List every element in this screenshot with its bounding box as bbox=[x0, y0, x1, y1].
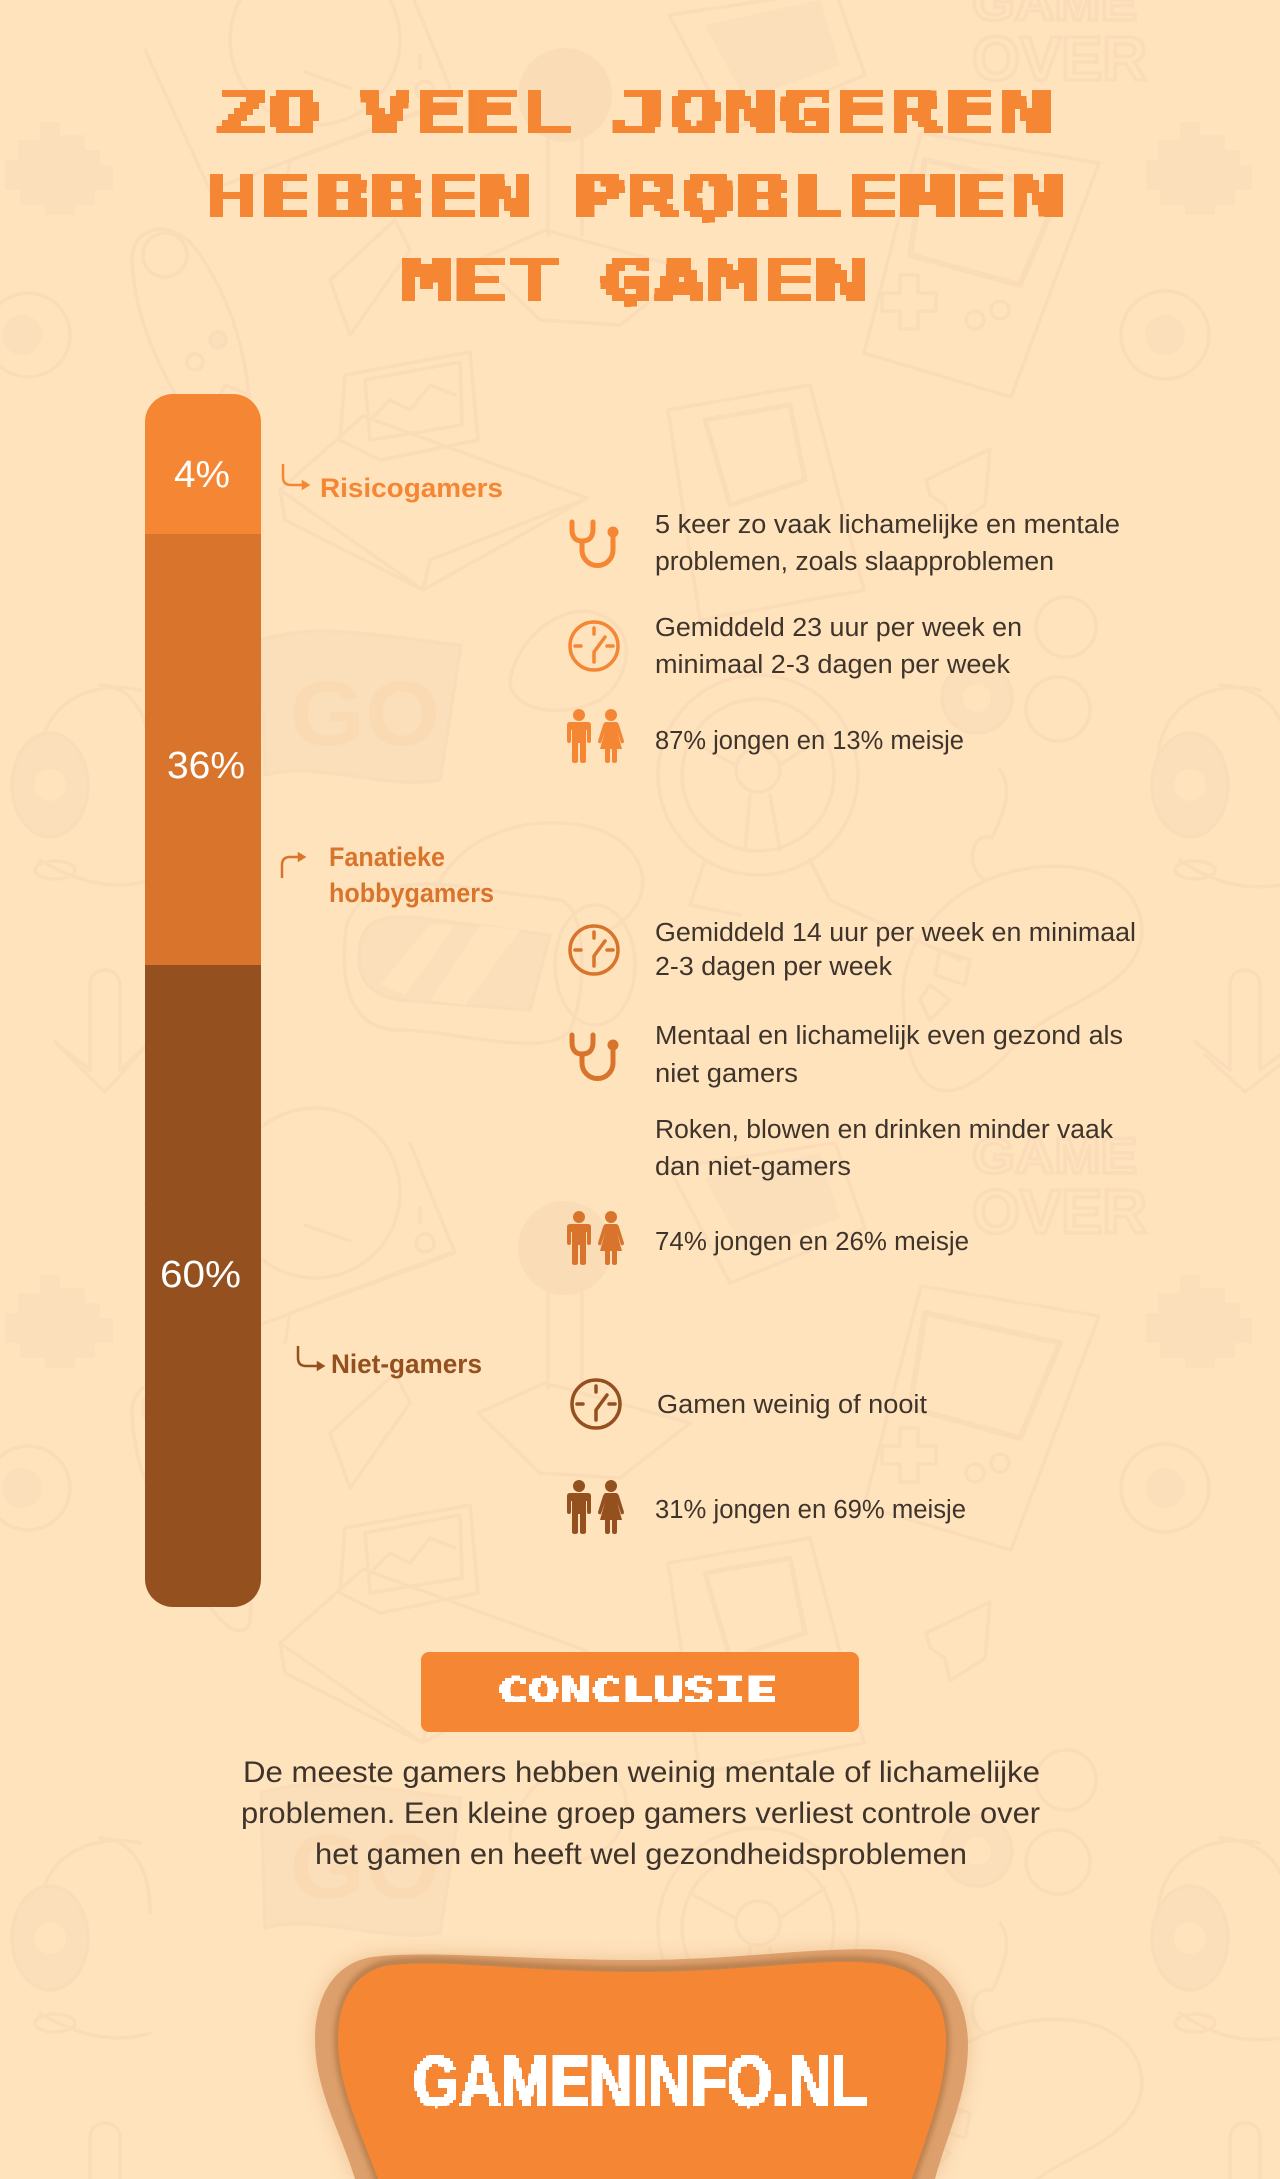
background pattern of faint game icons: GAME bbox=[972, 1128, 1137, 1184]
value: 36%: 36% bbox=[167, 745, 245, 787]
background pattern of faint game icons: OVER bbox=[972, 1178, 1147, 1247]
background pattern of faint game icons: GO bbox=[290, 663, 440, 765]
title: MET bbox=[400, 247, 560, 317]
value: 60%: 60% bbox=[160, 1254, 241, 1296]
title: GAMEN bbox=[599, 247, 869, 317]
text: 31% jongen: 31% jongen en 69% meisje bbox=[655, 1496, 966, 1524]
conclusion text: het gamen en heeft wel gezondheidsproblemen bbox=[315, 1838, 967, 1871]
icon: stethoscope risicogamers bbox=[572, 522, 616, 566]
label: fanatieke hobbygamers: hobbygamers bbox=[329, 878, 494, 908]
gameninfo.nl logo text: GAMENINFO.NL bbox=[413, 2043, 867, 2122]
title: PROBLEMEN bbox=[570, 163, 1065, 233]
conclusion text bbox=[241, 1756, 1040, 1871]
text: 23 uur per week: minimaal 2-3 dagen per week bbox=[655, 651, 1010, 679]
conclusion text: De meeste gamers hebben weinig mentale of lichamelijke bbox=[243, 1756, 1040, 1789]
text: 23 uur per week: Gemiddeld 23 uur per week en bbox=[655, 614, 1022, 642]
stacked percentage bar bbox=[145, 394, 261, 1607]
text: roken blowen drinken: Roken, blowen en drinken minder vaak bbox=[655, 1116, 1113, 1144]
footer badge bbox=[315, 1949, 968, 2179]
conclusie heading: CONCLUSIE bbox=[497, 1671, 777, 1711]
text: gamen weinig of nooit: Gamen weinig of nooit bbox=[657, 1391, 927, 1419]
icon: stethoscope hobbygamers bbox=[572, 1035, 616, 1078]
icon: people risicogamers bbox=[567, 709, 624, 763]
text: 14 uur per week bbox=[655, 919, 1136, 981]
text: even gezond bbox=[655, 1022, 1123, 1088]
text: 23 uur per week bbox=[655, 614, 1022, 679]
conclusion text: problemen. Een kleine groep gamers verliest controle over bbox=[241, 1797, 1040, 1830]
title bbox=[204, 78, 1065, 317]
icon: clock niet-gamers bbox=[572, 1380, 620, 1428]
arrow: fanatieke hobbygamers bbox=[282, 854, 304, 878]
text: lichamelijke problemen bbox=[655, 511, 1120, 576]
arrow: niet-gamers bbox=[298, 1346, 323, 1369]
conclusie button bbox=[421, 1652, 859, 1732]
title: ZO bbox=[216, 78, 320, 148]
background pattern of faint game icons: OVER bbox=[972, 25, 1147, 94]
text: lichamelijke problemen: 5 keer zo vaak lichamelijke en mentale bbox=[655, 511, 1120, 539]
label: niet-gamers: Niet-gamers bbox=[331, 1349, 482, 1379]
background pattern of faint game icons: GO bbox=[290, 1816, 440, 1918]
label: fanatieke hobbygamers bbox=[329, 842, 494, 908]
text: even gezond: Mentaal en lichamelijk even gezond als bbox=[655, 1022, 1123, 1050]
text: 87% jongen: 87% jongen en 13% meisje bbox=[655, 727, 964, 755]
text: 74% jongen: 74% jongen en 26% meisje bbox=[655, 1228, 969, 1256]
text: roken blowen drinken: dan niet-gamers bbox=[655, 1153, 851, 1181]
icon: clock hobbygamers bbox=[570, 926, 618, 974]
label: fanatieke hobbygamers: Fanatieke bbox=[329, 842, 445, 872]
value: 4%: 4% bbox=[174, 454, 230, 496]
title: JONGEREN bbox=[612, 78, 1052, 148]
text: roken blowen drinken bbox=[655, 1116, 1113, 1181]
segment: 4% risicogamers bbox=[145, 394, 261, 534]
label: risicogamers: Risicogamers bbox=[320, 473, 503, 503]
text: lichamelijke problemen: problemen, zoals slaapproblemen bbox=[655, 548, 1054, 576]
title: VEEL bbox=[359, 78, 572, 148]
segment: 36% fanatieke hobbygamers bbox=[145, 534, 261, 965]
text: 14 uur per week: Gemiddeld 14 uur per week en minimaal bbox=[655, 919, 1136, 947]
text: 14 uur per week: 2-3 dagen per week bbox=[655, 953, 892, 981]
segment: 60% niet-gamers bbox=[145, 965, 261, 1607]
title: HEBBEN bbox=[204, 163, 534, 233]
icon: people hobbygamers bbox=[567, 1211, 624, 1265]
icon: people niet-gamers bbox=[567, 1480, 624, 1534]
icon: clock risicogamers bbox=[570, 622, 618, 670]
text: even gezond: niet gamers bbox=[655, 1060, 798, 1088]
arrow: risicogamers bbox=[283, 464, 308, 488]
